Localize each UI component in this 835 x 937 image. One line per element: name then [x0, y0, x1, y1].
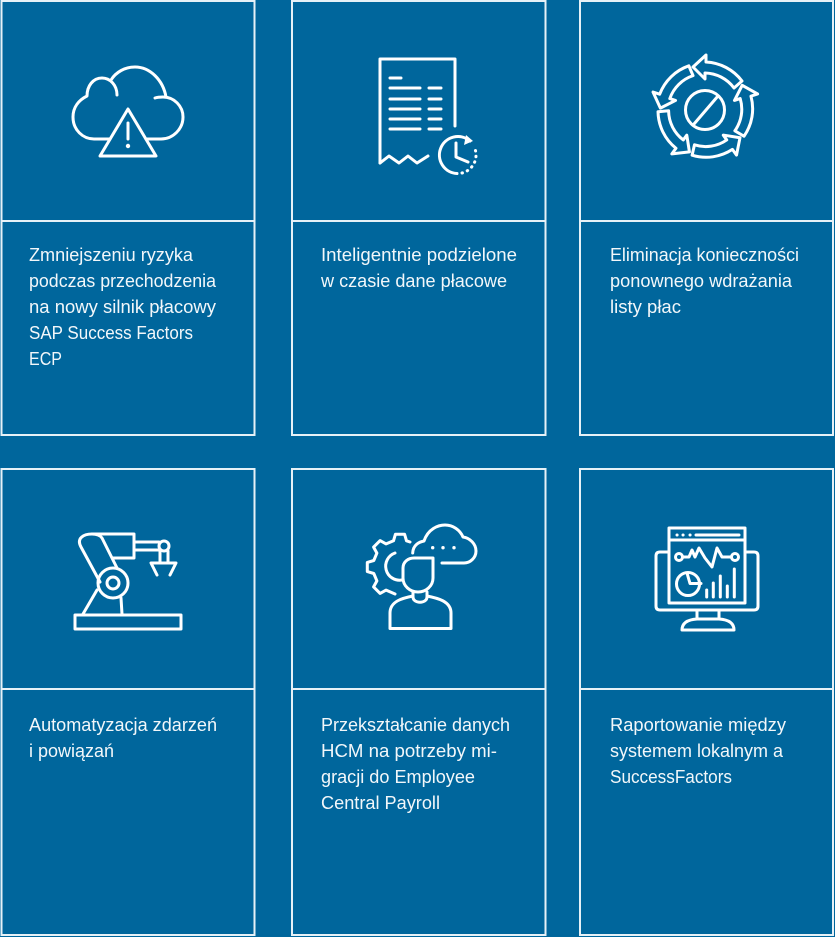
panel frame — [2, 469, 254, 935]
text: no reimplementation: Eliminacja konieczności — [610, 245, 799, 265]
panel: automation — [2, 469, 254, 935]
panel frame — [292, 1, 546, 435]
panel: no reimplementation — [580, 1, 833, 435]
text: HCM data: Central Payroll — [321, 793, 440, 813]
text: no reimplementation: ponownego wdrażania — [610, 271, 793, 291]
text: automation: Automatyzacja zdarzeń — [29, 715, 217, 735]
text: risk reduction — [29, 245, 217, 369]
panel: cloud risk — [2, 1, 254, 435]
panel: reporting — [580, 469, 833, 935]
text: risk reduction: Zmniejszeniu ryzyka — [29, 245, 194, 265]
text: HCM data: gracji do Employee — [321, 767, 475, 787]
panel: HCM data — [292, 469, 546, 935]
text: automation: i powiązań — [29, 741, 114, 761]
panel frame — [580, 1, 833, 435]
icon: cycle arrows with prohibition sign — [643, 55, 769, 176]
text: HCM data: HCM na potrzeby mi- — [321, 741, 497, 761]
panel frame — [2, 1, 254, 435]
text: reporting: Raportowanie między — [610, 715, 786, 735]
text: reporting — [610, 715, 786, 787]
text: reporting: systemem lokalnym a — [610, 741, 784, 761]
text: HCM data — [321, 715, 510, 813]
icon: person with gear and cloud — [367, 525, 476, 628]
text: reporting: SuccessFactors — [610, 767, 732, 787]
text: risk reduction: na nowy silnik płacowy — [29, 297, 216, 317]
text: payroll data: w czasie dane płacowe — [320, 271, 507, 291]
icon: monitor with dashboard — [656, 528, 758, 630]
panel frame — [580, 469, 833, 935]
icon: cloud with warning triangle — [73, 67, 183, 156]
text: automation — [29, 715, 217, 761]
text: HCM data: Przekształcanie danych — [321, 715, 510, 735]
text: payroll data: Inteligentnie podzielone — [321, 245, 517, 265]
text: no reimplementation: listy płac — [610, 297, 681, 317]
icon: robot arm — [75, 534, 181, 629]
text: payroll data — [320, 245, 517, 291]
text: risk reduction: ECP — [29, 349, 62, 369]
panel frame — [292, 469, 546, 935]
text: risk reduction: SAP Success Factors — [29, 323, 193, 343]
text: risk reduction: podczas przechodzenia — [29, 271, 217, 291]
icon: receipt with clock — [380, 59, 476, 174]
text: no reimplementation — [610, 245, 799, 317]
panel: payroll data — [292, 1, 546, 435]
